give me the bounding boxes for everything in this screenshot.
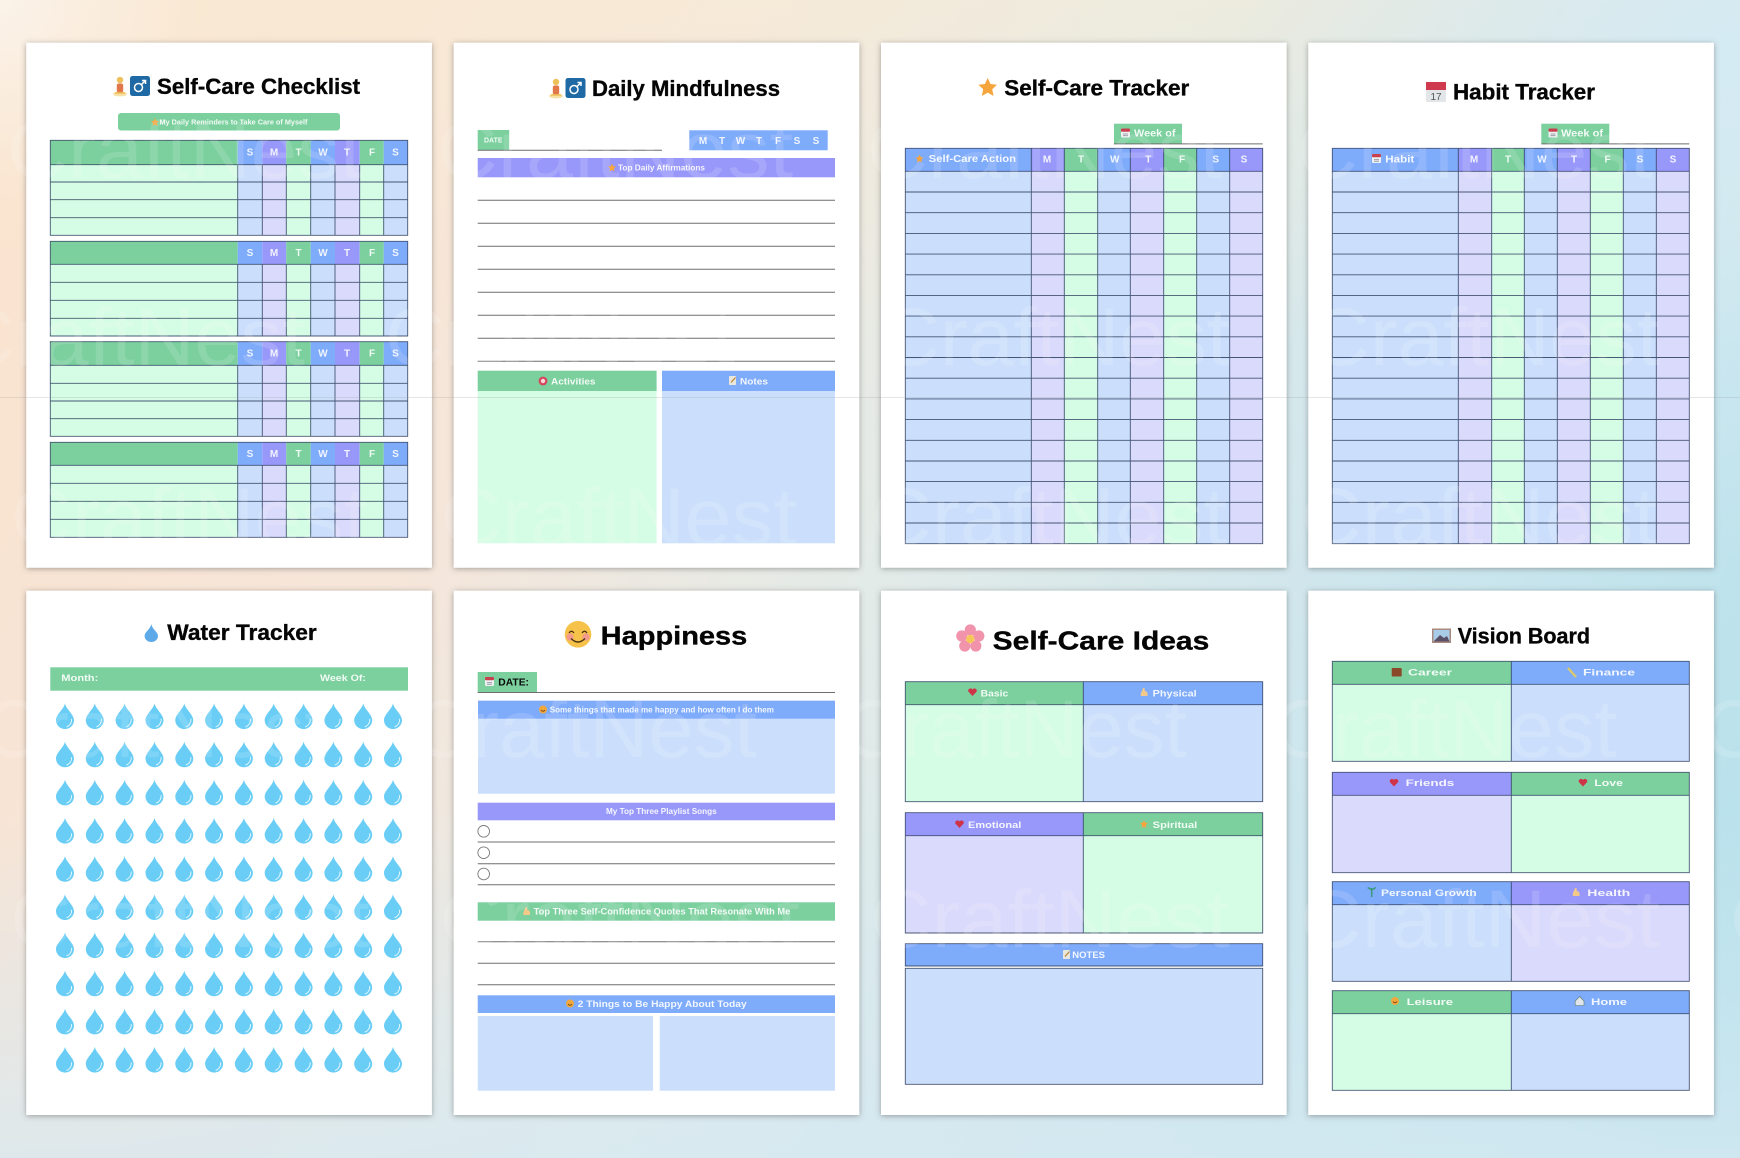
tracker table: W — [1110, 154, 1120, 165]
watermark: CraftNest — [870, 874, 1230, 965]
block: notes: NOTES — [1072, 950, 1105, 961]
table 4: W — [318, 449, 328, 460]
icon: meditating person — [549, 79, 563, 98]
icon: framed picture — [1432, 628, 1451, 643]
banner: playlist songs: My Top Three Playlist Songs — [606, 807, 717, 816]
table 4: S — [247, 449, 254, 460]
weekday strip: T — [756, 136, 762, 147]
weekday strip: M — [699, 136, 707, 147]
week of field: Week of — [1134, 129, 1176, 140]
panel: happiness — [454, 591, 859, 1115]
block: basic and physical — [905, 682, 1263, 802]
table 3: S — [247, 348, 254, 359]
block: career and finance: Finance — [1583, 668, 1635, 678]
icon: water drop — [145, 624, 158, 642]
panel: habit tracker — [1308, 43, 1714, 568]
watermark: CraftNest — [11, 472, 367, 563]
month and week bar: Week Of: — [320, 673, 366, 684]
banner: top daily affirmations — [478, 158, 835, 177]
block: notes — [905, 944, 1263, 1084]
table 2: F — [369, 248, 375, 259]
table 4: T — [295, 449, 302, 460]
tracker table: T — [1078, 154, 1084, 165]
week of field — [1114, 124, 1263, 144]
block: emotional and spiritual: Spiritual — [1153, 820, 1197, 831]
heading: vision board: Vision Board — [1458, 623, 1590, 648]
heading: self-care tracker: Self-Care Tracker — [1004, 76, 1190, 101]
banner: daily reminders — [118, 113, 340, 130]
heading: water tracker: Water Tracker — [167, 620, 317, 645]
block: friends and love: Friends — [1406, 778, 1454, 789]
banner: daily reminders: My Daily Reminders to Take Care of Myself — [160, 117, 308, 126]
block: happy things — [478, 701, 835, 794]
block: happy things: Some things that made me happy and how often I do them — [550, 706, 774, 715]
box: notes — [662, 371, 835, 543]
heading: self-care ideas: Self-Care Ideas — [993, 625, 1209, 655]
tracker table: Self-Care Action — [929, 154, 1016, 165]
weekday strip: T — [719, 136, 725, 147]
month and week bar: Month: — [61, 673, 98, 684]
habit table: T — [1571, 154, 1577, 165]
table 3: T — [295, 348, 302, 359]
icon: calendar: 17 — [1430, 92, 1442, 103]
table 1: T — [344, 148, 350, 158]
heading: happiness: Happiness — [601, 620, 747, 650]
watermark: CraftNest — [440, 874, 800, 965]
icon: smiling face — [565, 621, 591, 648]
table 2: T — [344, 248, 350, 259]
table 2: S — [392, 248, 399, 259]
watermark: CraftNest — [880, 292, 1230, 383]
habit table — [1332, 148, 1689, 544]
date field — [478, 130, 662, 150]
table 3: M — [270, 348, 278, 359]
table 2: S — [247, 248, 254, 259]
icon: flower — [956, 624, 984, 652]
habit table: S — [1670, 154, 1677, 165]
affirmation writing lines — [478, 200, 835, 361]
week of field: Week of — [1561, 129, 1604, 140]
table 4: F — [369, 449, 375, 460]
weekday strip: F — [775, 136, 781, 147]
block: basic and physical: Basic — [981, 688, 1008, 699]
icon: meditating person — [113, 77, 127, 96]
box: happy thing one — [478, 1016, 653, 1091]
box: notes: Notes — [740, 376, 768, 386]
block: career and finance: Career — [1408, 668, 1452, 678]
tracker table — [905, 148, 1263, 544]
table 4 — [50, 442, 408, 537]
table 4: T — [344, 449, 350, 460]
table 1: W — [318, 148, 328, 158]
habit table: Habit — [1385, 154, 1415, 165]
table 3 — [50, 342, 408, 436]
table 3: F — [369, 348, 375, 359]
block: personal growth and health: Health — [1587, 888, 1631, 899]
banner: top daily affirmations: Top Daily Affirmations — [618, 164, 705, 173]
banner: self-confidence quotes: Top Three Self-Confidence Quotes That Resonate With Me — [534, 906, 790, 916]
table 1: F — [369, 148, 375, 158]
icon: male sign — [566, 78, 586, 98]
table 1: S — [392, 148, 399, 158]
water drop grid — [56, 703, 402, 1073]
watermark: CraftNest — [441, 472, 797, 563]
habit table: W — [1537, 154, 1547, 165]
watermark: CraftNest — [1310, 292, 1660, 383]
heading: habit tracker: Habit Tracker — [1453, 80, 1595, 105]
panel: vision board — [1308, 591, 1714, 1115]
box: happy thing two — [660, 1016, 835, 1091]
date field — [478, 672, 835, 692]
table 2: M — [270, 248, 278, 259]
panel: self-care checklist — [26, 43, 432, 568]
watermark: CraftNest — [1297, 105, 1653, 196]
watermark: CraftNest — [385, 292, 735, 383]
table 1: S — [247, 148, 254, 158]
block: personal growth and health — [1332, 882, 1689, 981]
heading: daily mindfulness: Daily Mindfulness — [592, 76, 780, 101]
icon: star — [978, 78, 997, 96]
habit table: S — [1637, 154, 1644, 165]
box: activities: Activities — [551, 376, 596, 386]
icon: calendar — [1426, 82, 1446, 103]
habit table: F — [1604, 154, 1611, 165]
panel: self-care tracker — [881, 43, 1287, 568]
banner: happy today: 2 Things to Be Happy About Today — [578, 999, 747, 1010]
banner: happy today — [478, 995, 835, 1013]
quote writing lines — [478, 942, 835, 985]
tracker table: M — [1043, 154, 1051, 165]
watermark — [0, 105, 1740, 965]
table 2 — [50, 241, 408, 336]
banner: playlist songs — [478, 803, 835, 820]
habit table: T — [1505, 154, 1511, 165]
watermark: CraftNest — [871, 472, 1227, 563]
watermark: CraftNest — [437, 105, 793, 196]
panel: water tracker — [26, 591, 432, 1115]
icon: male sign — [130, 76, 150, 96]
block: emotional and spiritual: Emotional — [968, 820, 1021, 831]
weekday strip: S — [794, 136, 801, 147]
block: leisure and home — [1332, 991, 1689, 1090]
watermark: CraftNest — [7, 105, 363, 196]
block: career and finance — [1332, 661, 1689, 761]
table 1 — [50, 140, 408, 235]
date field: DATE: — [498, 676, 529, 688]
watermark: CraftNest — [10, 874, 370, 965]
habit table: M — [1470, 154, 1478, 165]
playlist checklist — [478, 826, 835, 885]
weekday strip: S — [813, 136, 820, 147]
table 3: W — [318, 348, 328, 359]
panel: self-care ideas — [881, 591, 1287, 1115]
weekday strip: W — [736, 136, 746, 147]
block: basic and physical: Physical — [1153, 688, 1197, 699]
heading: self-care checklist: Self-Care Checklist — [157, 74, 361, 99]
table 3: T — [344, 348, 350, 359]
tracker table: T — [1145, 154, 1151, 165]
watermark: CraftNest — [1300, 874, 1660, 965]
watermark: CraftNest — [867, 105, 1223, 196]
watermark: CraftNest — [843, 684, 1187, 775]
tracker table: S — [1241, 154, 1248, 165]
block: leisure and home: Home — [1591, 997, 1627, 1008]
weekday strip — [689, 130, 828, 150]
box: activities — [478, 371, 657, 543]
date field: DATE — [484, 138, 503, 144]
table 4: S — [392, 449, 399, 460]
tracker table: S — [1212, 154, 1219, 165]
block: leisure and home: Leisure — [1407, 997, 1453, 1008]
table 2: W — [318, 248, 328, 259]
block: personal growth and health: Personal Growth — [1381, 888, 1477, 899]
table 1: T — [295, 148, 302, 158]
block: emotional and spiritual — [905, 813, 1263, 933]
table 1: M — [270, 148, 278, 158]
tracker table: F — [1179, 154, 1185, 165]
banner: self-confidence quotes — [478, 902, 835, 921]
block: friends and love: Love — [1594, 778, 1623, 789]
week of field — [1541, 124, 1689, 144]
table 2: T — [295, 248, 302, 259]
block: friends and love — [1332, 772, 1689, 873]
month and week bar — [50, 667, 408, 691]
watermark: CraftNest — [1273, 684, 1617, 775]
panel: daily mindfulness — [454, 43, 859, 568]
watermark: CraftNest — [413, 684, 757, 775]
watermark: CraftNest — [1301, 472, 1657, 563]
table 3: S — [392, 348, 399, 359]
table 4: M — [270, 449, 278, 460]
